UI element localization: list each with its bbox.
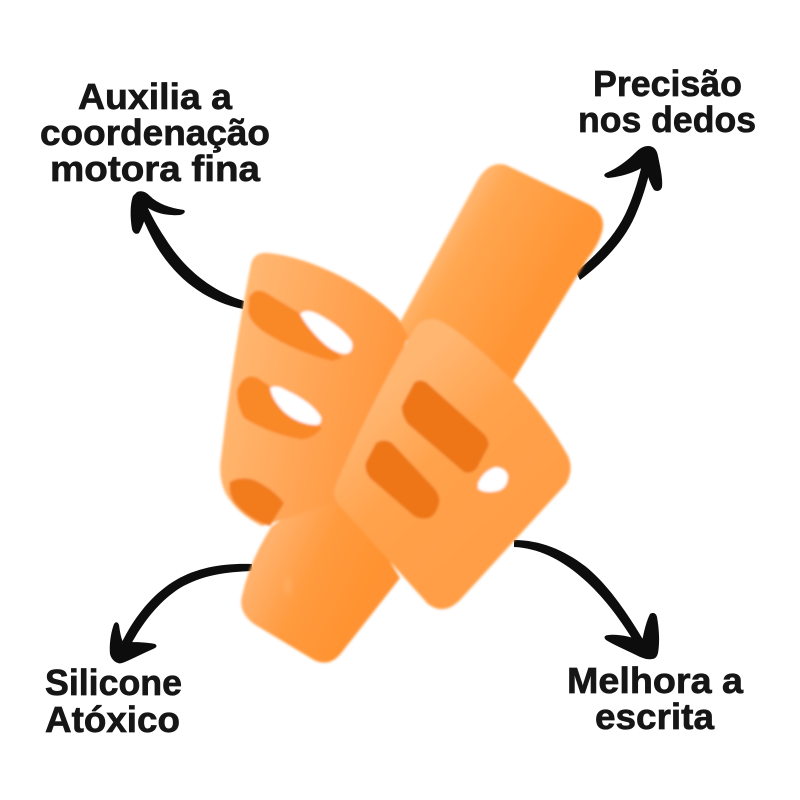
label: Precisão nos dedos: nos dedos — [578, 99, 756, 140]
label: Silicone Atóxico: Atóxico — [45, 699, 180, 740]
arrow: towards Melhora a escrita — [514, 540, 659, 659]
lower slot with white opening — [237, 376, 322, 439]
small white hole — [478, 467, 508, 492]
label: Auxilia a coordenação motora fina: Auxilia a — [78, 76, 233, 117]
upper slot — [402, 380, 488, 473]
label: Auxilia a coordenação motora fina — [40, 76, 270, 189]
lower slot — [366, 440, 439, 519]
upper slot with white opening — [248, 291, 352, 361]
label: Precisão nos dedos — [578, 63, 756, 140]
lower pencil bar — [241, 480, 400, 663]
product: orange silicone pencil grip — [220, 164, 603, 663]
arrow: towards Silicone Atóxico — [110, 564, 252, 663]
bottom slot — [230, 478, 284, 526]
label: Auxilia a coordenação motora fina: coordenação — [40, 112, 270, 153]
label: Auxilia a coordenação motora fina: motora fina — [50, 148, 261, 189]
right finger grip — [334, 319, 571, 609]
arrow: towards Precisão nos dedos — [576, 146, 662, 280]
label: Silicone Atóxico — [45, 662, 182, 740]
label: Precisão nos dedos: Precisão — [593, 63, 742, 104]
label: Melhora a escrita: Melhora a — [567, 660, 744, 701]
label: Melhora a escrita — [567, 660, 744, 737]
label: Silicone Atóxico: Silicone — [45, 662, 182, 703]
left finger grip — [220, 253, 408, 526]
label: Melhora a escrita: escrita — [595, 696, 715, 737]
upper pencil bar — [398, 164, 603, 386]
arrow: towards Auxilia a coordenação motora fina — [131, 191, 244, 309]
